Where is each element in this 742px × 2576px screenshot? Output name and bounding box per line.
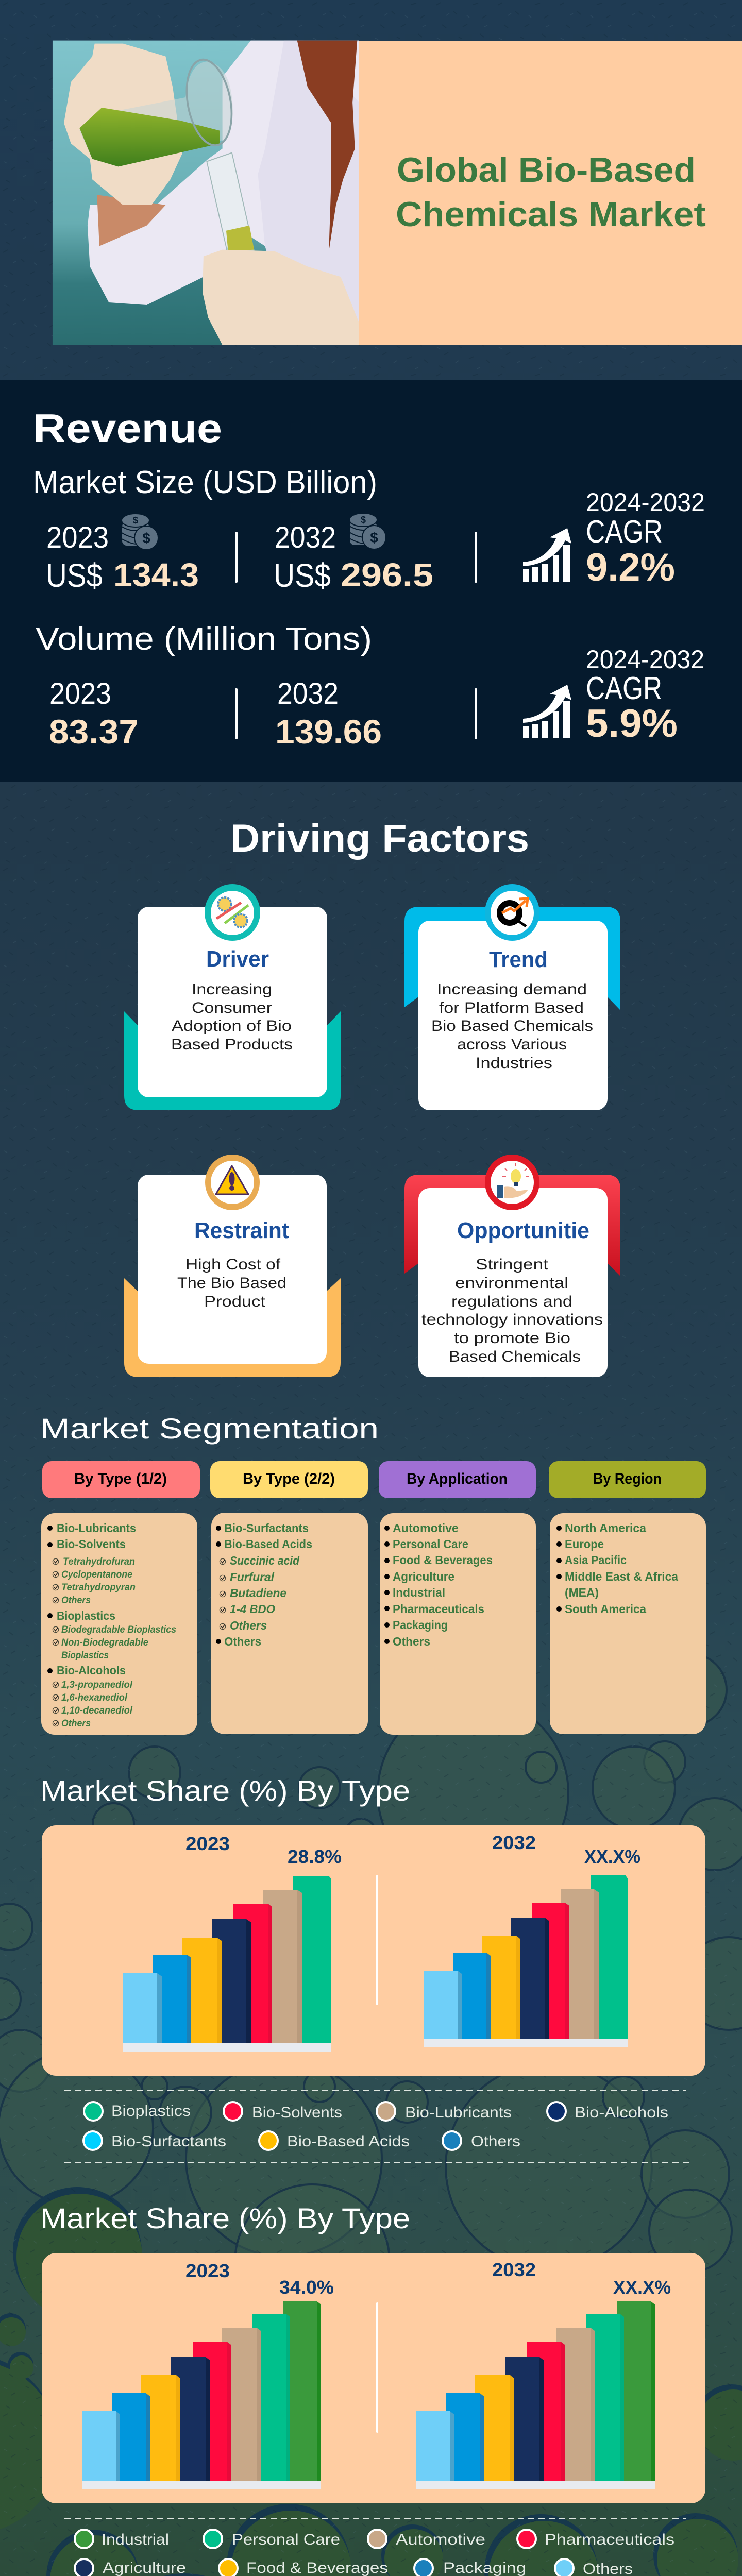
market size label: Market Size (USD Billion): [33, 465, 377, 500]
segment panel: by type 1: 1,6-hexanediol: [61, 1692, 128, 1703]
stat: market size 2032: US$: [274, 557, 331, 594]
segment panel: by region: South America: [565, 1602, 646, 1616]
stat: market size 2032: [274, 521, 433, 594]
segment panel: by application: [380, 1513, 536, 1735]
segment panel: by type 1: Others: [61, 1718, 91, 1729]
stat: market size 2023: [46, 521, 199, 594]
segment panel: by region: Middle East & Africa: [565, 1570, 678, 1583]
legend: by type: Bio-Surfactants: [111, 2133, 226, 2150]
driver text: Based Products: [171, 1036, 293, 1053]
segment panel: by application: Pharmaceuticals: [393, 1602, 484, 1616]
stat: volume 2032: 139.66: [275, 713, 382, 751]
trend heading: Trend: [489, 947, 548, 972]
segment panel: by type 2: Butadiene: [230, 1586, 286, 1600]
segment header: by region: [549, 1461, 706, 1498]
heading: driving factors: Driving Factors: [230, 817, 529, 860]
chart panel: share by type: [42, 1825, 705, 2076]
segment panel: by type 2: Bio-Surfactants: [224, 1521, 309, 1535]
opportunity text: to promote Bio: [454, 1330, 570, 1347]
legend: by application: Industrial: [102, 2531, 169, 2548]
stat: volume CAGR: CAGR: [586, 671, 662, 706]
bar chart: application 2032: [416, 2301, 655, 2489]
segment panel: by region: (MEA): [565, 1586, 599, 1599]
stat: volume 2032: 2032: [277, 677, 339, 710]
stat: market size 2023: US$: [46, 557, 103, 594]
icon: opportunity badge: [485, 1155, 539, 1210]
segment panel: by type 1: 1,3-propanediol: [61, 1680, 133, 1690]
stat: volume CAGR: 2024-2032: [586, 645, 704, 674]
card: trend: [404, 884, 620, 1110]
segment panel: by application: Others: [393, 1635, 430, 1648]
legend: by type: Bio-Lubricants: [405, 2104, 512, 2121]
heading: market segmentation: Market Segmentation: [40, 1412, 379, 1445]
stat: market size 2023: 2023: [46, 521, 109, 554]
value label 34.0%: 34.0%: [279, 2277, 334, 2298]
restraint text: Product: [204, 1293, 266, 1310]
legend: by application: [64, 2518, 691, 2576]
segment panel: by application: Food & Beverages: [393, 1553, 493, 1567]
segment panel: by type 1: Tetrahydrofuran: [63, 1556, 135, 1567]
divider: [376, 1875, 378, 2005]
segment panel: by type 1: Biodegradable Bioplastics: [61, 1624, 176, 1635]
segment panel: by type 2: Others: [224, 1635, 261, 1648]
legend: by type: Bio-Based Acids: [287, 2133, 410, 2150]
segment panel: by type 1: Bio-Lubricants: [57, 1521, 136, 1535]
icon: coins: $: [370, 530, 378, 546]
stat: revenue CAGR: [586, 488, 705, 589]
segment panel: by type 1: Bio-Alcohols: [57, 1664, 126, 1677]
hero photo: scientist pouring green liquid: [53, 41, 359, 345]
legend: by application: Personal Care: [232, 2531, 340, 2548]
card: restraint: [124, 1155, 341, 1377]
driver text: Consumer: [192, 999, 272, 1016]
segment panel: by type 1: Others: [61, 1595, 91, 1606]
heading: market share by application: Market Share (%) By Type: [40, 2202, 410, 2234]
segment header: by application: By Application: [407, 1470, 508, 1487]
opportunity text: regulations and: [451, 1293, 572, 1310]
divider: [235, 532, 238, 583]
chart panel: share by application: [42, 2253, 705, 2503]
bar chart: type 2032: [424, 1875, 628, 2047]
stat: volume 2023: [49, 677, 139, 751]
bubbles: upper teal field: [0, 1654, 742, 2339]
bar chart: application 2023: [82, 2301, 321, 2489]
stat: market size 2023: 134.3: [113, 556, 199, 594]
legend: by type: Bioplastics: [111, 2103, 191, 2120]
year label 2032: 2032: [492, 1832, 536, 1853]
stat: revenue CAGR: CAGR: [586, 514, 663, 550]
driver text: Increasing: [192, 981, 272, 998]
segment panel: by region: Europe: [565, 1537, 604, 1551]
segment panel: by type 2: Furfural: [230, 1570, 275, 1584]
bar chart: type 2023: [123, 1876, 331, 2052]
segment panel: by application: Industrial: [393, 1586, 445, 1599]
trend text: [431, 981, 593, 1072]
legend: by type: Bio-Alcohols: [575, 2104, 668, 2121]
segment header: by type 2: By Type (2/2): [243, 1470, 335, 1487]
icon: driver badge: [205, 884, 260, 941]
segment panel: by type 1: Tetrahydropyran: [61, 1582, 136, 1593]
segment panel: by type 1: 1,10-decanediol: [61, 1705, 133, 1716]
opportunity text: environmental: [455, 1275, 568, 1292]
restraint heading: Restraint: [194, 1218, 289, 1243]
segment panel: by application: Automotive: [393, 1521, 459, 1535]
trend text: for Platform Based: [439, 999, 584, 1016]
segment panel: by application: Agriculture: [393, 1570, 454, 1583]
segment panel: by type 1: Bioplastics: [57, 1609, 115, 1622]
stat: volume 2023: 83.37: [49, 713, 139, 751]
segment panel: by type 2: Bio-Based Acids: [224, 1537, 312, 1551]
volume label: Volume (Million Tons): [36, 621, 372, 657]
segment header: by application: [379, 1461, 536, 1498]
icon: coins: [349, 513, 386, 549]
hero panel: [53, 41, 742, 345]
opportunity text: Based Chemicals: [449, 1348, 581, 1365]
trend text: Increasing demand: [437, 981, 587, 998]
icon: coins: [122, 514, 158, 550]
revenue panel: [0, 380, 742, 782]
icon: growth arrow: [523, 528, 571, 582]
bubbles: lower green field: [0, 2187, 742, 2576]
title: Global Bio-Based: [397, 150, 696, 190]
segment panel: by region: Asia Pacific: [565, 1553, 627, 1567]
stat: volume 2032: [275, 677, 382, 751]
legend: by application: Automotive: [396, 2531, 485, 2548]
opportunity text: [421, 1256, 603, 1365]
title: Chemicals Market: [396, 195, 706, 234]
year label 2032: 2032: [492, 2259, 536, 2280]
segment header: by type 1: By Type (1/2): [74, 1470, 167, 1487]
segment panel: by region: [550, 1513, 706, 1734]
segment panel: by application: Packaging: [393, 1618, 448, 1632]
value label XX.X%: XX.X%: [613, 2277, 671, 2298]
restraint text: [177, 1256, 286, 1310]
icon: restraint badge: [205, 1155, 260, 1210]
segment panel: by type 2: [211, 1513, 368, 1734]
icon: growth arrow: [523, 685, 571, 738]
legend: by type: Others: [471, 2133, 520, 2150]
divider: [475, 532, 477, 583]
value label XX.X%: XX.X%: [584, 1846, 640, 1867]
stat: revenue CAGR: 9.2%: [586, 546, 675, 589]
legend: by type: [64, 2091, 691, 2163]
restraint text: The Bio Based: [177, 1275, 286, 1292]
heading: revenue: Revenue: [33, 405, 222, 451]
driver text: Adoption of Bio: [172, 1018, 292, 1035]
segment header: by type 2: [210, 1461, 368, 1498]
year label 2023: 2023: [185, 1833, 230, 1854]
title: [396, 150, 706, 234]
restraint text: High Cost of: [185, 1256, 281, 1273]
segment panel: by region: North America: [565, 1521, 646, 1535]
segment panel: by type 2: Others: [230, 1619, 267, 1632]
driver text: [171, 981, 293, 1053]
stat: market size 2032: 2032: [275, 521, 336, 554]
trend text: Industries: [476, 1055, 552, 1072]
legend: by type: Bio-Solvents: [252, 2104, 342, 2121]
stat: market size 2032: 296.5: [341, 556, 433, 594]
opportunity text: technology innovations: [421, 1311, 603, 1328]
divider: [235, 688, 238, 739]
icon: coins: $: [142, 530, 150, 546]
opportunity text: Stringent: [476, 1256, 549, 1273]
trend text: across Various: [457, 1036, 567, 1053]
stat: volume 2023: 2023: [49, 677, 111, 710]
icon: coins: $: [361, 515, 366, 525]
stat: volume CAGR: [586, 645, 704, 745]
trend text: Bio Based Chemicals: [431, 1018, 593, 1035]
icon: trend badge: [485, 884, 539, 941]
card: opportunity: [404, 1155, 620, 1377]
stat: volume CAGR: 5.9%: [586, 702, 678, 745]
segment panel: by type 1: Bio-Solvents: [57, 1537, 126, 1551]
title panel: [359, 41, 742, 345]
icon: coins: $: [133, 515, 138, 526]
segment panel: by type 1: Bioplastics: [61, 1650, 109, 1661]
segment panel: by application: Personal Care: [393, 1537, 468, 1551]
legend: by application: Pharmaceuticals: [545, 2531, 674, 2548]
segment header: by type 1: [42, 1461, 200, 1498]
divider: [475, 688, 477, 739]
year label 2023: 2023: [185, 2260, 230, 2281]
driver heading: Driver: [206, 946, 269, 972]
value label 28.8%: 28.8%: [288, 1846, 342, 1867]
segment panel: by type 1: [41, 1513, 197, 1735]
segment panel: by type 1: Non-Biodegradable: [61, 1637, 148, 1648]
segment panel: by type 2: Succinic acid: [230, 1554, 300, 1567]
opportunity heading: Opportunitie: [457, 1218, 589, 1243]
segment panel: by type 1: Cyclopentanone: [61, 1569, 132, 1580]
card: driver: [124, 884, 341, 1110]
divider: [376, 2302, 378, 2433]
stat: revenue CAGR: 2024-2032: [586, 488, 705, 517]
segment panel: by type 2: 1-4 BDO: [230, 1602, 275, 1616]
heading: market share by type: Market Share (%) By Type: [40, 1774, 410, 1807]
segment header: by region: By Region: [593, 1470, 662, 1487]
